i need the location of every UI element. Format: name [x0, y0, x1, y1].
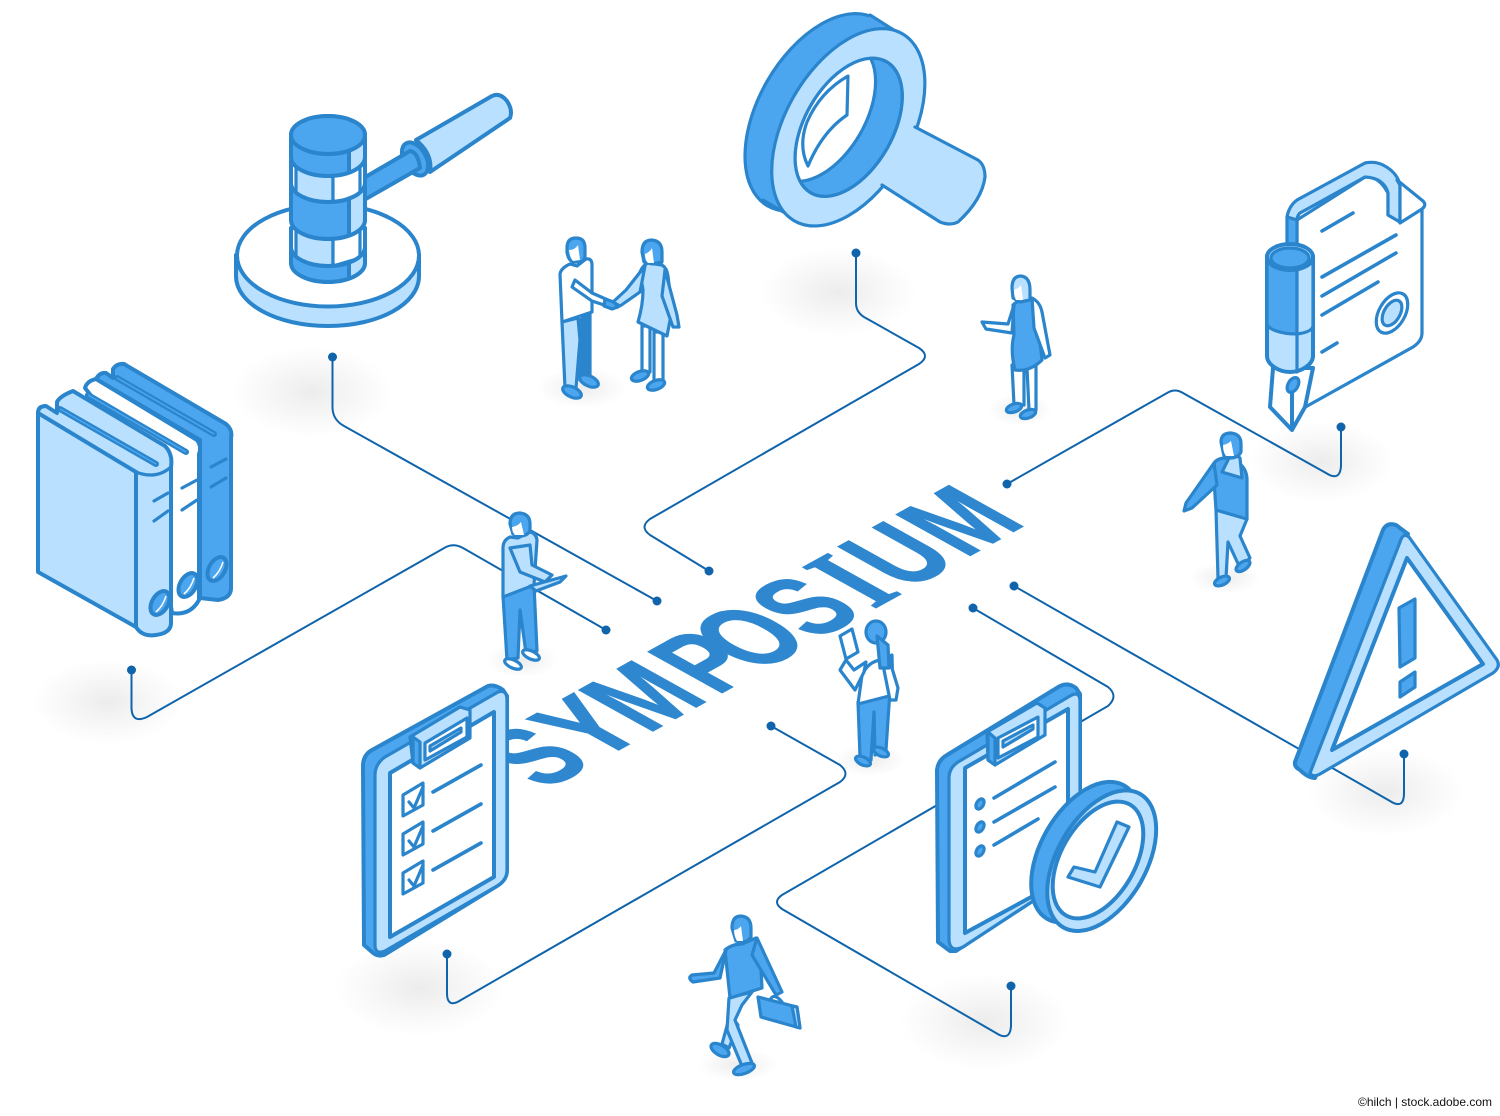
- connector: checklist to title: [442, 722, 846, 1003]
- connector: document to title: [1002, 390, 1346, 488]
- person: man with tablet: [503, 513, 566, 671]
- checklist tick boxes: [403, 783, 423, 894]
- fountain pen nib: [1270, 368, 1313, 430]
- icon: magnifying glass: [743, 12, 987, 228]
- connector: magnifier to title: [644, 248, 925, 576]
- approval clip: [987, 703, 1045, 765]
- icon: gavel: [236, 95, 511, 326]
- document text lines: [1322, 213, 1396, 352]
- person: man on the phone walking: [1184, 433, 1252, 588]
- warning triangle inner: [1332, 558, 1483, 750]
- title: SYMPOSIUM: [446, 469, 1052, 804]
- warning triangle depth: [1295, 524, 1408, 778]
- gavel head: [291, 116, 365, 282]
- person: woman reading phone: [840, 621, 898, 768]
- exclamation mark: [1399, 599, 1415, 697]
- connector: approval to title: [777, 604, 1114, 1036]
- connector: books to title: [127, 545, 610, 719]
- woman shaking hands: [613, 240, 679, 392]
- connector: gavel to title: [328, 352, 662, 606]
- person: man with briefcase walking: [690, 916, 800, 1077]
- icon: signed document with fountain pen: [1267, 162, 1425, 430]
- connector: warning to title: [1010, 582, 1408, 804]
- icon: checklist clipboard: [363, 686, 507, 956]
- checklist board: [363, 686, 507, 956]
- man shaking hands: [560, 238, 618, 401]
- credit line: ©hilch | stock.adobe.com: [1358, 1095, 1492, 1109]
- magnifier lens: [794, 56, 904, 198]
- warning triangle face: [1310, 535, 1498, 776]
- approval bullets and lines: [974, 762, 1055, 858]
- people: handshake: [560, 238, 679, 401]
- document seal: [1370, 287, 1414, 339]
- magnifier front ring and handle: [740, 2, 985, 252]
- check badge: [1009, 763, 1179, 950]
- document page: [1287, 162, 1425, 410]
- middle book: [85, 379, 201, 613]
- icon: approval clipboard with check badge: [937, 684, 1179, 951]
- fountain pen barrel: [1267, 244, 1313, 372]
- approval board: [937, 684, 1080, 951]
- checklist lines: [433, 765, 481, 870]
- icon: stack of books: [38, 364, 231, 635]
- soft ground shadows: [33, 248, 1463, 1081]
- gavel base: [236, 204, 419, 326]
- checklist clip: [410, 707, 470, 768]
- person: woman gesturing: [982, 276, 1050, 420]
- magnifier rim depth: [713, 0, 930, 237]
- checklist paper: [390, 712, 494, 937]
- approval paper: [965, 709, 1068, 933]
- icon: warning triangle: [1295, 524, 1498, 778]
- back book: [96, 364, 231, 600]
- front book: [38, 391, 173, 635]
- gavel handle: [362, 95, 511, 200]
